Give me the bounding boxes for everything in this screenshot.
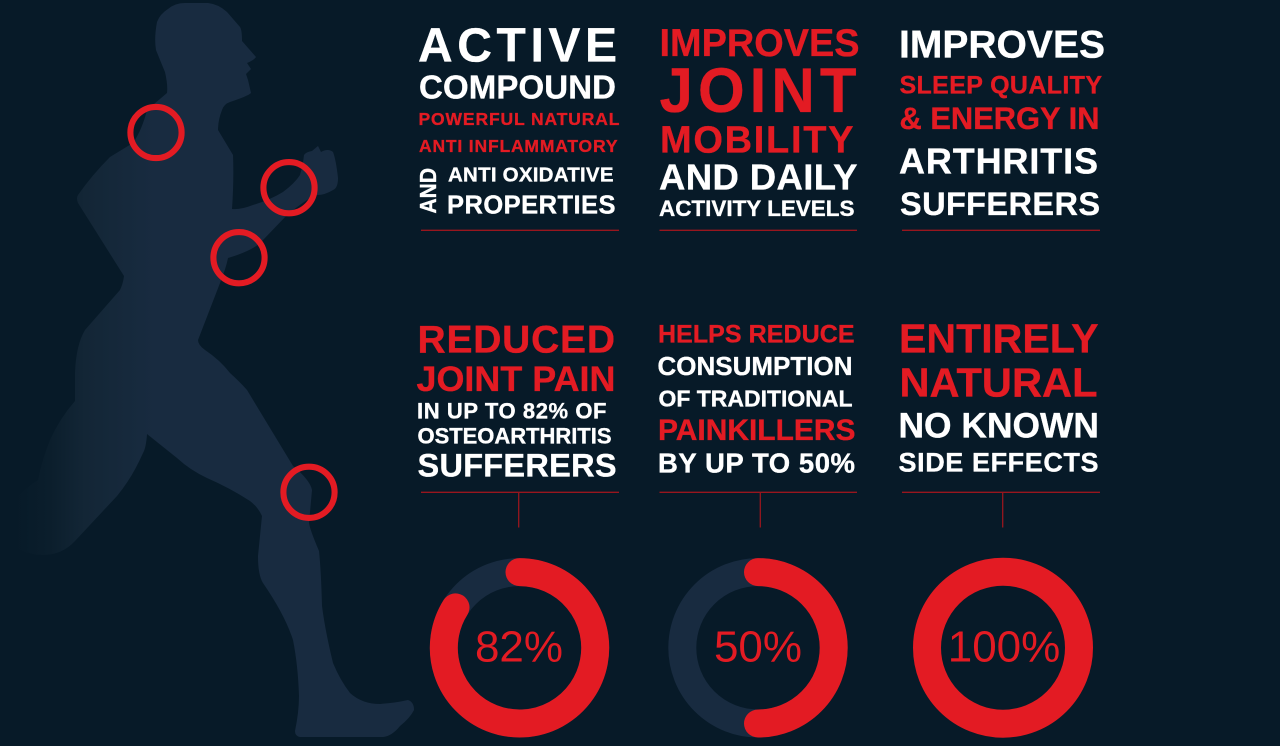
panel: reduced painkiller use: CONSUMPTION xyxy=(658,351,852,381)
panel: sleep quality and energy: SLEEP QUALITY xyxy=(900,71,1102,99)
panel: active compound: PROPERTIES xyxy=(447,191,616,219)
panel: sleep quality and energy: IMPROVES xyxy=(899,23,1105,66)
runner silhouette xyxy=(15,3,414,737)
panel: reduced painkiller use: PAINKILLERS xyxy=(658,414,856,447)
panel: reduced joint pain: JOINT PAIN xyxy=(416,359,616,399)
donut chart: 50% xyxy=(682,572,834,724)
panel: active compound: AND xyxy=(415,168,441,214)
runner silhouette with joint markers xyxy=(15,3,414,737)
panel: reduced joint pain: IN UP TO 82% OF xyxy=(417,398,606,423)
panel: reduced joint pain: OSTEOARTHRITIS xyxy=(418,423,612,448)
panel: sleep quality and energy: & ENERGY IN xyxy=(900,100,1100,136)
panel: joint mobility: IMPROVES xyxy=(660,22,860,65)
panel: reduced painkiller use: HELPS REDUCE xyxy=(658,321,854,349)
panel: reduced painkiller use xyxy=(658,321,857,528)
panel: joint mobility: AND DAILY xyxy=(659,156,858,197)
donut chart: 50%: 50% xyxy=(714,623,802,672)
panel: entirely natural: NATURAL xyxy=(900,360,1098,406)
panel: reduced joint pain: SUFFERERS xyxy=(418,448,616,484)
panel: reduced joint pain: REDUCED xyxy=(418,319,615,362)
panel: active compound: ACTIVE xyxy=(418,20,617,73)
panel: joint mobility: JOINT xyxy=(660,56,856,126)
joint marker: wrist xyxy=(263,162,315,213)
panel: entirely natural: SIDE EFFECTS xyxy=(898,447,1098,477)
donut chart: 82% xyxy=(444,572,595,724)
donut chart: 100% xyxy=(927,572,1079,724)
joint marker: elbow xyxy=(213,232,265,283)
panel: joint mobility: MOBILITY xyxy=(660,120,854,162)
panel: joint mobility: ACTIVITY LEVELS xyxy=(659,196,854,221)
panel: sleep quality and energy: ARTHRITIS xyxy=(899,140,1098,181)
panel: entirely natural: ENTIRELY xyxy=(899,316,1098,362)
panel: joint mobility xyxy=(659,22,860,230)
panel: reduced joint pain xyxy=(416,319,619,528)
panel: entirely natural: NO KNOWN xyxy=(898,406,1099,446)
panel: reduced painkiller use: OF TRADITIONAL xyxy=(658,386,852,412)
panel: active compound: COMPOUND xyxy=(419,68,616,106)
panel: sleep quality and energy xyxy=(899,23,1105,230)
panel: active compound: POWERFUL NATURAL xyxy=(418,109,620,129)
panel: entirely natural xyxy=(898,316,1100,528)
donut chart: 100%: 100% xyxy=(948,623,1060,672)
donut chart: 82%: 82% xyxy=(475,623,563,672)
joint marker: shoulder xyxy=(130,107,182,158)
panel: reduced painkiller use: BY UP TO 50% xyxy=(658,448,855,479)
panel: active compound xyxy=(415,20,620,230)
panel: active compound: ANTI OXIDATIVE xyxy=(448,164,614,187)
panel: active compound: ANTI INFLAMMATORY xyxy=(419,136,618,156)
joint marker: knee xyxy=(283,467,335,518)
panel: sleep quality and energy: SUFFERERS xyxy=(900,186,1100,222)
